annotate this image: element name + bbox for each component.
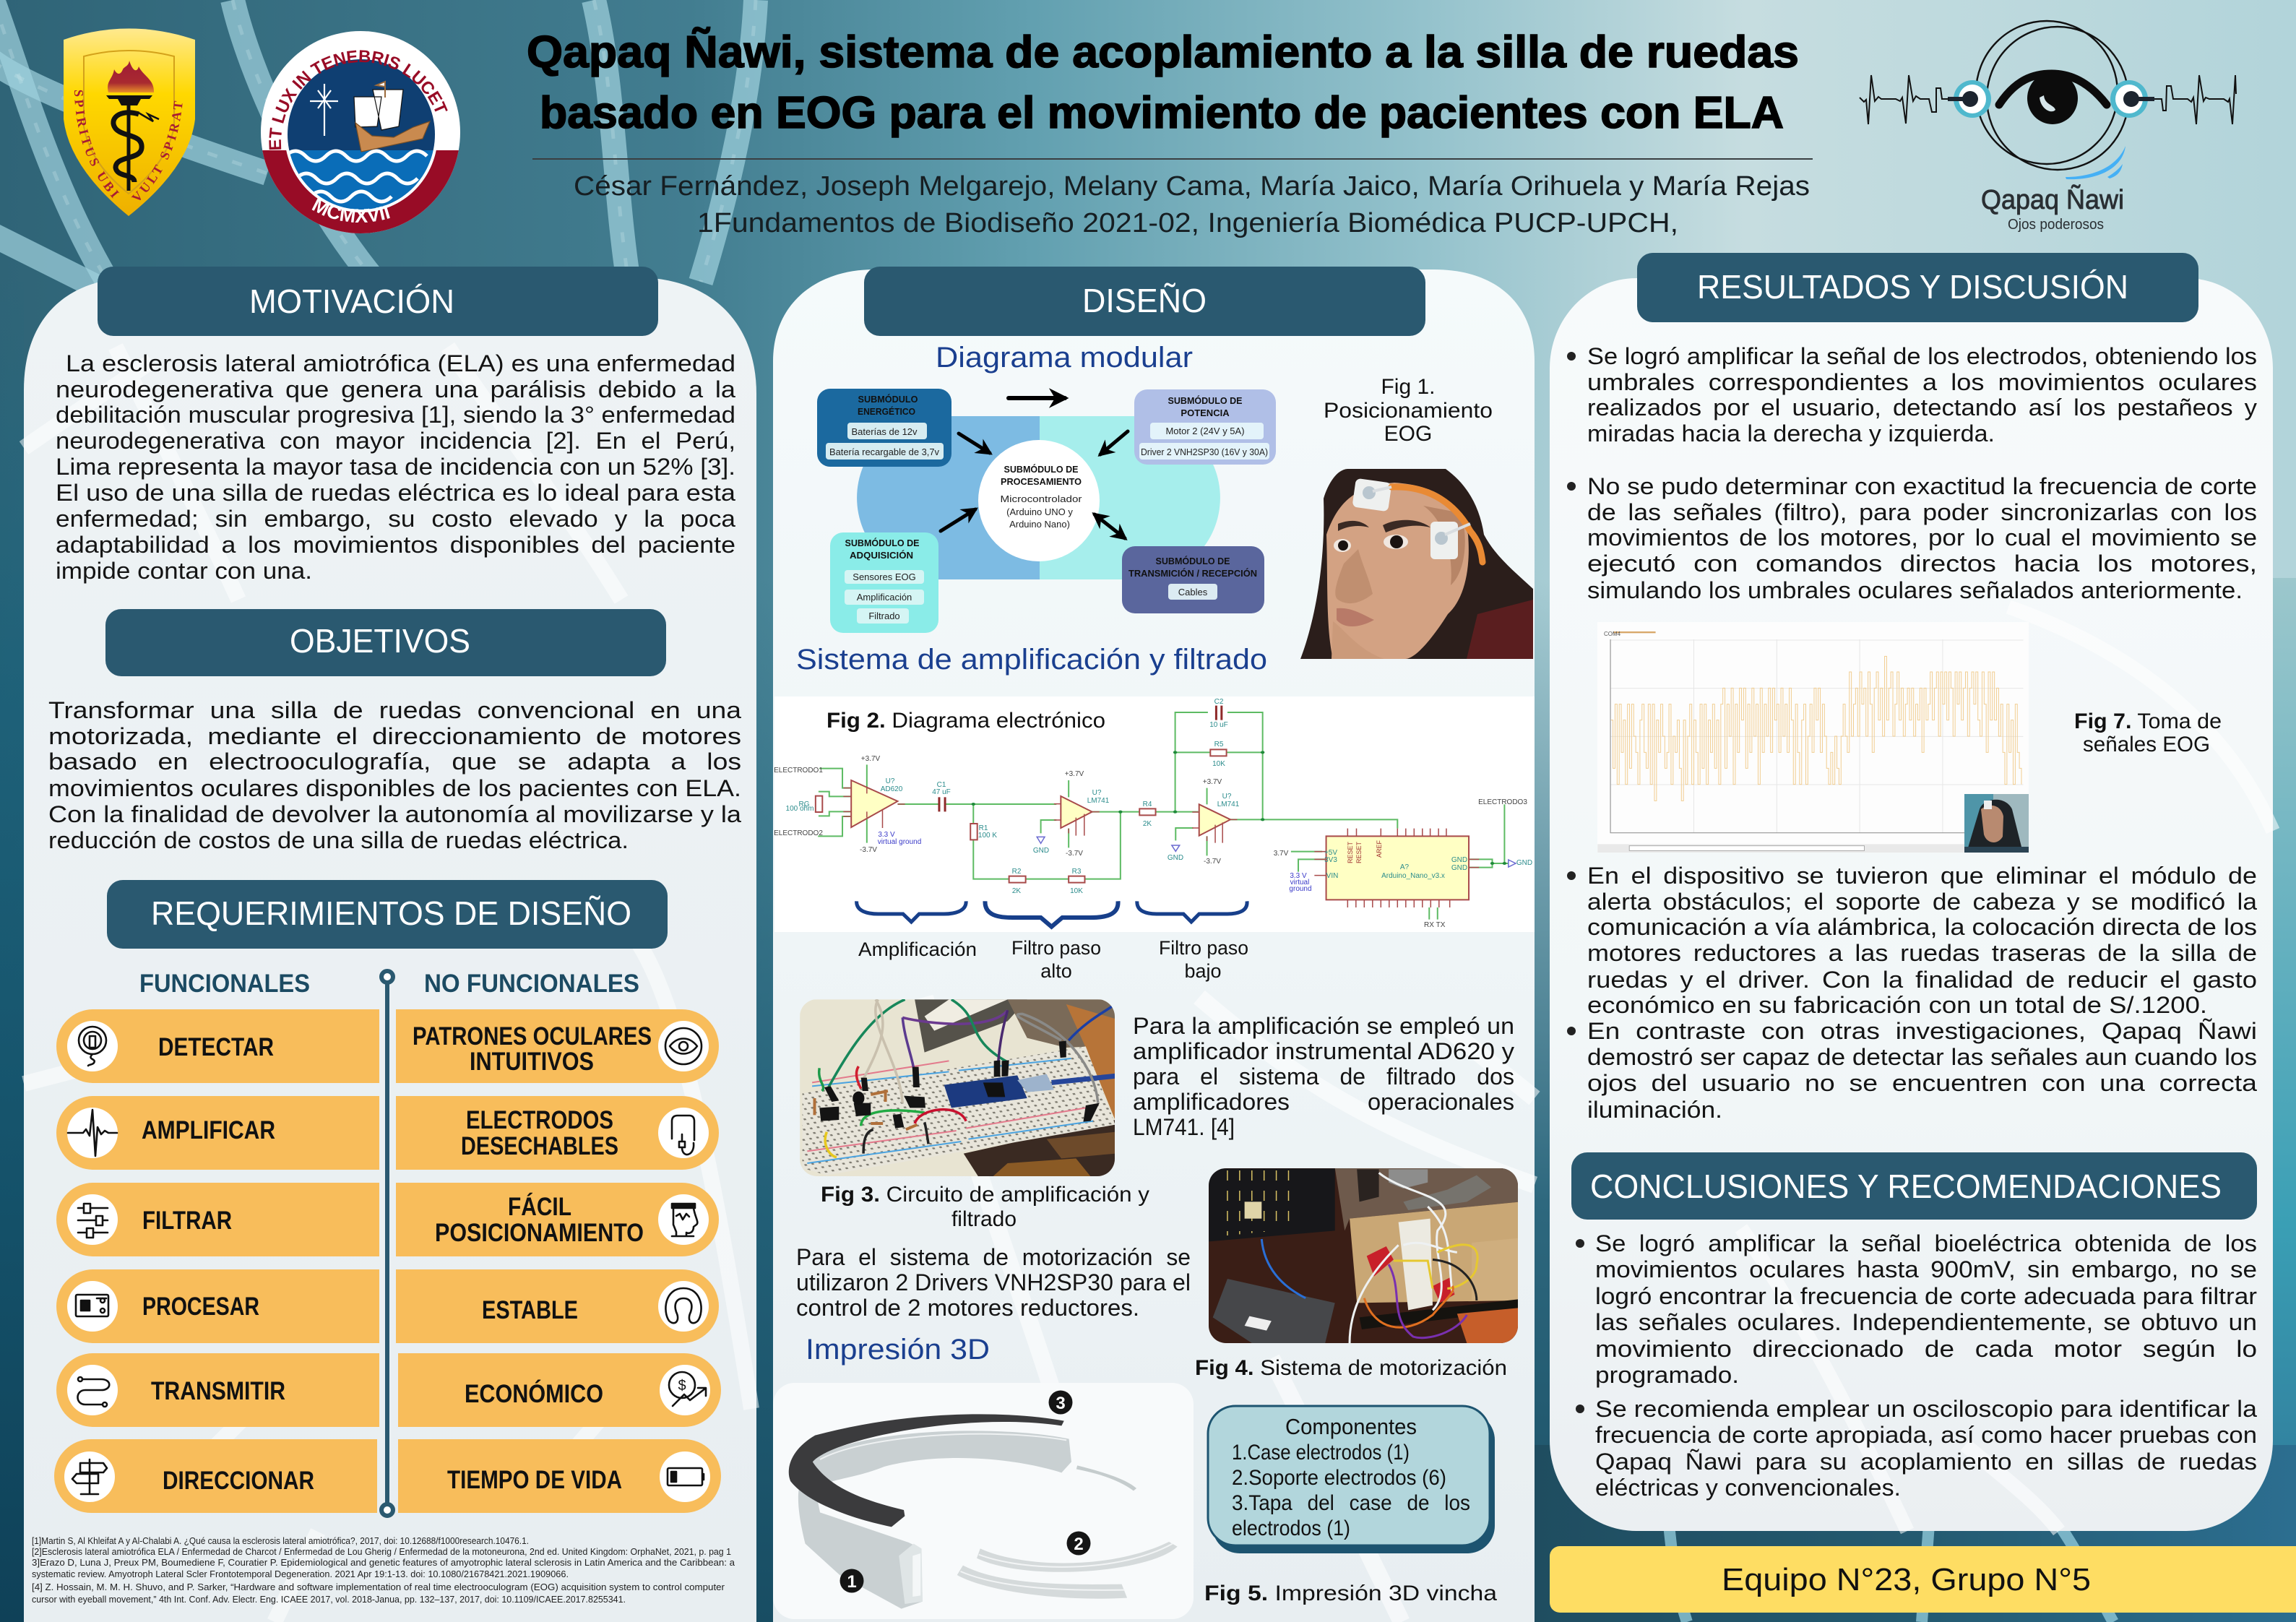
text block: amplification: [1133, 1013, 1514, 1140]
requirement: Electrodos desechables: [396, 1096, 719, 1170]
requirement: Transmitir: TRANSMITIR: [151, 1377, 285, 1405]
text block: Motivación: impide contar con una.: [56, 558, 312, 584]
electronic schematic: 10 uF: [1209, 721, 1228, 729]
electronic schematic: ELECTRODO2: [774, 829, 823, 837]
requirement: Estable: ESTABLE: [482, 1296, 578, 1324]
text block: Motivación: neurodegenerativa con mayor incidencia [2]. En el Perú,: [56, 428, 735, 454]
electronic schematic: virtual ground: [878, 838, 921, 846]
heading: Conclusiones y recomendaciones: CONCLUSIONES Y RECOMENDACIONES: [1590, 1168, 2222, 1205]
authors and affiliation: 1Fundamentos de Biodiseño 2021-02, Ingeniería Biomédica PUCP-UPCH,: [697, 208, 1678, 238]
schematic stage labels: alto: [1040, 960, 1072, 982]
requirement: Filtrar: FILTRAR: [142, 1207, 232, 1235]
callout 3: 3: [1056, 1394, 1066, 1413]
text block: results first bullets: umbrales correspondientes a los movimientos oculares: [1587, 369, 2257, 395]
electronic schematic: [774, 696, 1535, 932]
caption: Fig 4: Fig 4. Sistema de motorización: [1195, 1356, 1507, 1380]
text block: Motivación: El uso de una silla de ruedas eléctrica es lo ideal para esta: [56, 480, 735, 506]
electronic schematic: RESET: [1347, 841, 1354, 863]
text block: Motivación: adaptabilidad a los movimientos disponibles del paciente: [56, 532, 735, 558]
text block: amplification: amplificador instrumental AD620 y: [1133, 1038, 1514, 1064]
text block: conclusions: movimiento direccionado de cada motor según lo: [1595, 1336, 2257, 1362]
caption: Fig 2: Fig 2. Diagrama electrónico: [827, 709, 1105, 733]
electronic schematic: virtual: [1290, 879, 1309, 887]
text block: results second bullets: [1567, 863, 2257, 1123]
heading: Conclusiones y recomendaciones: [1571, 1152, 2257, 1220]
requirement: Patrones oculares intuitivos: [396, 1009, 719, 1083]
authors and affiliation: [574, 171, 1810, 238]
team banner: Equipo N°23, Grupo N°5: [1722, 1562, 2091, 1597]
module: adquisición: ADQUISICIÓN: [850, 550, 913, 561]
text block: conclusions: frecuencia de corte apropiada, así como hacer pruebas con: [1595, 1422, 2257, 1448]
requirement: Procesar: PROCESAR: [142, 1293, 259, 1321]
photo: face with electrodes: [1300, 469, 1533, 659]
electronic schematic: +3.7V: [861, 755, 881, 763]
caption: Fig 1: Posicionamiento: [1324, 399, 1493, 423]
brackets: [857, 901, 1247, 927]
heading: Resultados y discusión: [1637, 253, 2198, 322]
text block: conclusions: movimientos oculares hasta 900mV, sin embargo, no se: [1595, 1256, 2257, 1282]
callout 2: 2: [1074, 1535, 1084, 1554]
requirement: Direccionar: [54, 1439, 377, 1513]
electronic schematic: 3V3: [1324, 856, 1337, 864]
photo: amplification breadboard: [800, 999, 1115, 1176]
text block: Motivación: debilitación muscular progresiva [1], siendo la 3° enfermedad: [56, 402, 735, 428]
icon: pulse: [68, 1110, 117, 1156]
text block: motorization: [796, 1244, 1191, 1321]
electronic schematic: R2: [1012, 868, 1022, 876]
components box: Componentes: [1285, 1414, 1417, 1439]
title: Qapaq Ñawi, sistema de acoplamiento a la silla de ruedas: [527, 27, 1799, 77]
references: [32, 1535, 735, 1605]
requirement: Fácil posicionamiento: [396, 1183, 719, 1256]
column headings: [139, 970, 639, 998]
icon: circuit board: [76, 1295, 108, 1316]
electronic schematic: Arduino_Nano_v3.x: [1381, 872, 1445, 880]
electronic schematic: GND: [1451, 864, 1467, 872]
electronic schematic: 2K: [1012, 887, 1021, 895]
module: transmisión: [1122, 546, 1264, 613]
components box: 2.Soporte electrodos (6): [1232, 1466, 1446, 1490]
electronic schematic: VIN: [1326, 872, 1338, 880]
text block: results first bullets: realizados por el usuario, detectando así los pestañeos y: [1587, 394, 2257, 420]
electronic schematic: RESET: [1355, 841, 1363, 863]
electronic schematic: R5: [1214, 741, 1224, 749]
requirement: Fácil posicionamiento: FÁCIL: [508, 1192, 571, 1221]
text block: motorization: control de 2 motores reductores.: [796, 1295, 1139, 1321]
heading: Motivación: [98, 267, 658, 336]
text block: Objetivos: Transformar una silla de ruedas convencional en una: [48, 697, 741, 723]
text block: results second bullets: iluminación.: [1587, 1097, 1722, 1123]
electronic schematic: 3.3 V: [878, 831, 895, 839]
icon: money growth: $: [678, 1378, 686, 1394]
icon: battery: [668, 1468, 704, 1485]
3D printed headband render: [773, 1383, 1194, 1619]
icon: signpost: [72, 1459, 107, 1494]
text block: results second bullets: ojos del usuario no se encuentren con una correcta: [1587, 1070, 2257, 1096]
electronic schematic: U?: [1092, 789, 1102, 797]
logo: PUCP seal: MCMXVII: [312, 198, 390, 223]
module: adquisición: Filtrado: [868, 611, 900, 621]
icon: neck pillow: [665, 1288, 702, 1323]
electronic schematic: 47 uF: [932, 788, 951, 796]
requirement: Amplificar: AMPLIFICAR: [142, 1116, 275, 1144]
logo: Qapaq Ñawi eye: [1860, 21, 2236, 233]
heading: Requerimientos de diseño: [107, 880, 668, 949]
text block: results second bullets: alerta obstáculos; el soporte de cabeza y se modificó la: [1587, 889, 2257, 915]
requirement: Amplificar: [56, 1096, 379, 1170]
schematic stage labels: Filtro paso: [1011, 937, 1101, 959]
module: procesamiento: PROCESAMIENTO: [1001, 476, 1082, 487]
text block: results second bullets: ruedas y el driver. Con la finalidad de reducir el gasto: [1587, 967, 2257, 993]
electronic schematic: U?: [886, 777, 895, 785]
caption: Fig 7: Fig 7. Toma de: [2074, 709, 2222, 733]
electronic schematic: AREF: [1376, 840, 1383, 858]
text block: conclusions: programado.: [1595, 1362, 1739, 1388]
text block: results second bullets: demostró ser capaz de detectar las señales aun cuando los: [1587, 1044, 2257, 1070]
heading: Objetivos: OBJETIVOS: [290, 622, 470, 660]
module: adquisición: Amplificación: [857, 592, 912, 603]
text block: results second bullets: En el dispositivo se tuvieron que eliminar el módulo de: [1587, 863, 2257, 889]
title: basado en EOG para el movimiento de pacientes con ELA: [540, 88, 1784, 138]
text block: Motivación: La esclerosis lateral amiotrófica (ELA) es una enfermedad: [66, 350, 735, 376]
requirement: Direccionar: DIRECCIONAR: [163, 1467, 314, 1495]
arrows: [941, 398, 1128, 538]
electronic schematic: U?: [1222, 793, 1232, 801]
text block: amplification: amplificadores: [1133, 1089, 1290, 1115]
heading: Motivación: MOTIVACIÓN: [249, 282, 454, 320]
panel: left column: [24, 267, 756, 1622]
caption: Fig 3: Fig 3. Circuito de amplificación y: [821, 1183, 1149, 1207]
text block: conclusions: logró encontrar la frecuencia de corte adecuada para filtrar: [1595, 1283, 2257, 1309]
text block: Motivación: neurodegenerativa que genera una parálisis debido a la: [56, 376, 735, 402]
text block: conclusions: Se logró amplificar la señal bioeléctrica obtenida de los: [1595, 1230, 2257, 1256]
subheading: Sistema de amplificación y filtrado: Sistema de amplificación y filtrado: [796, 644, 1267, 676]
heading: Diseño: DISEÑO: [1082, 282, 1207, 319]
text block: results second bullets: económico en su fabricación con un total de S/.1200.: [1587, 992, 2207, 1018]
text block: motorization: utilizaron 2 Drivers VNH2SP30 para el: [796, 1269, 1191, 1295]
electronic schematic: ELECTRODO1: [774, 767, 823, 775]
callout 3: [1049, 1390, 1072, 1415]
text block: results first bullets: No se pudo determinar con exactitud la frecuencia de corte: [1587, 473, 2257, 499]
electronic schematic: AD620: [881, 785, 903, 793]
text block: conclusions: [1576, 1230, 2257, 1501]
module: adquisición: SUBMÓDULO DE: [845, 538, 920, 548]
electronic schematic: TX: [1436, 921, 1446, 929]
text block: Objetivos: reducción de costos de una silla de ruedas eléctrica.: [48, 827, 629, 853]
module: energético: SUBMÓDULO: [858, 394, 918, 405]
module: procesamiento: (Arduino UNO y: [1006, 506, 1073, 517]
requirement: Detectar: [56, 1009, 379, 1083]
panel: right column: [1550, 253, 2273, 1531]
text block: conclusions: Se recomienda emplear un osciloscopio para identificar la: [1595, 1396, 2257, 1422]
components box: 3.Tapa del case de los: [1232, 1491, 1470, 1515]
logo: Facultad de medicina shield: VULT SPIRAT: [131, 101, 183, 200]
heading: Requerimientos de diseño: REQUERIMIENTOS DE DISEÑO: [151, 894, 631, 932]
electronic schematic: 10K: [1212, 760, 1225, 768]
module: adquisición: Sensores EOG: [853, 571, 916, 582]
electronic schematic: LM741: [1217, 801, 1240, 808]
icon: electrode: [79, 1027, 106, 1066]
callout 1: 1: [847, 1572, 857, 1592]
electronic schematic: GND: [1516, 859, 1532, 867]
schematic stage labels: [858, 937, 1248, 982]
components box: electrodos (1): [1232, 1517, 1350, 1540]
electronic schematic: LM741: [1087, 797, 1110, 805]
module: transmisión: SUBMÓDULO DE: [1156, 556, 1230, 566]
electronic schematic: +3.7V: [1065, 770, 1084, 778]
caption: Fig 7: señales EOG: [2083, 733, 2210, 756]
references: [2]Esclerosis lateral amiotrófica ELA / Enfermedad de Charcot / Enfermedad de Lou Gherig / Enfermedad de la motoneurona, 2nd ed. United Kingdom: OrphaNet, 2021, p. pag 1: [32, 1546, 731, 1557]
text block: results second bullets: En contraste con otras investigaciones, Qapaq Ñawi: [1587, 1018, 2257, 1044]
electronic schematic: GND: [1451, 856, 1467, 864]
icon: money growth: [669, 1372, 706, 1406]
logo: Qapaq Ñawi eye: Ojos poderosos: [2008, 217, 2104, 233]
requirement: Tiempo de vida: [398, 1439, 721, 1513]
requirement: Económico: [398, 1353, 721, 1427]
module: procesamiento: Microcontrolador: [1000, 493, 1082, 504]
text block: results second bullets: comunicación a vía alámbrica, la colocación directa de los: [1587, 914, 2257, 940]
heading: Resultados y discusión: RESULTADOS Y DISCUSIÓN: [1697, 268, 2128, 306]
callout 2: [1066, 1532, 1091, 1555]
electronic schematic: A?: [1400, 863, 1410, 871]
text block: results second bullets: motores reductores a las ruedas traseras de la silla de: [1587, 940, 2257, 966]
electronic schematic: -3.7V: [860, 846, 877, 854]
text block: conclusions: las señales oculares. Independientemente, se obtuvo un: [1595, 1309, 2257, 1335]
logo: PUCP seal: ET LUX IN TENEBRIS LUCET: [269, 50, 448, 150]
caption: Fig 5: Fig 5. Impresión 3D vincha: [1204, 1582, 1497, 1605]
text block: results first bullets: ejecutó con comandos directos hacia los motores,: [1587, 551, 2257, 577]
electronic schematic: ELECTRODO3: [1478, 798, 1527, 806]
components box: [1208, 1406, 1495, 1553]
module: procesamiento: [1000, 464, 1082, 530]
panel: centre column: [773, 267, 1535, 1622]
module: potencia: [1134, 389, 1276, 465]
text block: Motivación: [56, 350, 735, 584]
electronic schematic: 2K: [1143, 820, 1152, 828]
timeline divider: [381, 971, 393, 1516]
text block: amplification: Para la amplificación se empleó un: [1133, 1013, 1514, 1039]
electronic schematic: R1: [979, 824, 988, 832]
webcam inset: [1964, 794, 2029, 853]
module: potencia: Motor 2 (24V y 5A): [1165, 426, 1245, 436]
electronic schematic: 100 K: [978, 832, 997, 840]
heading: Diseño: [864, 267, 1425, 336]
module: energético: Baterías de 12v: [851, 426, 918, 437]
requirement: Patrones oculares intuitivos: INTUITIVOS: [470, 1048, 594, 1076]
text block: results first bullets: movimientos de los motores, por lo cual el movimiento se: [1587, 525, 2257, 551]
logo: Qapaq Ñawi eye: Qapaq Ñawi: [1981, 184, 2124, 215]
schematic stage labels: Amplificación: [858, 939, 977, 960]
electronic schematic: +5V: [1324, 849, 1337, 857]
module: adquisición: [830, 532, 938, 633]
icon: sliders: [78, 1204, 108, 1238]
column headings: FUNCIONALES: [139, 970, 310, 998]
requirement: Tiempo de vida: TIEMPO DE VIDA: [447, 1466, 622, 1494]
requirement: Electrodos desechables: ELECTRODOS: [466, 1106, 613, 1134]
electronic schematic: C1: [937, 781, 946, 789]
components box: 1.Case electrodos (1): [1232, 1441, 1410, 1464]
caption: Fig 7: [2074, 709, 2222, 756]
text block: Objetivos: Con la finalidad de devolver la autonomía al movilizarse y la: [48, 801, 741, 827]
electronic schematic: 3.3 V: [1290, 872, 1307, 880]
caption: Fig 3: [821, 1183, 1149, 1231]
requirement: Patrones oculares intuitivos: PATRONES OCULARES: [413, 1022, 652, 1051]
icon: electrode pad: [672, 1116, 694, 1155]
electronic schematic: R3: [1072, 868, 1082, 876]
electronic schematic: 3.7V: [1274, 850, 1289, 858]
module: transmisión: Cables: [1178, 587, 1208, 598]
text block: conclusions: eléctricas y convencionales.: [1595, 1475, 1901, 1501]
subheading: Impresión 3D: Impresión 3D: [806, 1334, 990, 1366]
text block: Objetivos: basado en electrooculografía, que se adapta a los: [48, 749, 741, 775]
caption: Fig 3: filtrado: [951, 1207, 1017, 1231]
electronic schematic: -3.7V: [1066, 850, 1083, 858]
references: cursor with eyeball movement,” 4th Int. Conf. Adv. Electr. Eng. ICAEE 2017, vol. 2018-Janua, pp. 132–137, 2017, doi: 10.1109/ICAEE.2017.8255341.: [32, 1594, 626, 1605]
chart: EOG serial plotter screenshot: COM4: [1604, 631, 1621, 637]
text block: motorization: Para el sistema de motorización se: [796, 1244, 1191, 1270]
electronic schematic: +3.7V: [1203, 778, 1222, 786]
text block: results first bullets: de las señales (filtro), para poder sincronizarlas con los: [1587, 499, 2257, 525]
logo: PUCP seal: [261, 31, 460, 233]
module: potencia: SUBMÓDULO DE: [1168, 395, 1243, 406]
caption: Fig 1: [1324, 375, 1493, 446]
icon: head: [672, 1204, 697, 1236]
title: [527, 27, 1813, 160]
electronic schematic: C2: [1214, 698, 1224, 706]
callout 1: [840, 1569, 864, 1592]
caption: Fig 1: Fig 1.: [1381, 375, 1436, 399]
authors and affiliation: César Fernández, Joseph Melgarejo, Melany Cama, María Jaico, María Orihuela y María Rejas: [574, 171, 1810, 202]
electronic schematic: ground: [1289, 885, 1312, 893]
requirement: Estable: [396, 1269, 719, 1343]
requirement: Económico: ECONÓMICO: [465, 1379, 603, 1408]
electronic schematic: R4: [1143, 801, 1152, 808]
module: energético: ENERGÉTICO: [858, 406, 915, 417]
electronic schematic: 100 ohm: [786, 805, 813, 813]
text block: results first bullets: [1567, 343, 2257, 603]
requirement: Electrodos desechables: DESECHABLES: [461, 1132, 618, 1160]
module: procesamiento: Arduino Nano): [1009, 519, 1070, 530]
module: procesamiento: SUBMÓDULO DE: [1004, 464, 1079, 475]
logo: Facultad de medicina shield: [64, 29, 195, 216]
caption: Fig 1: EOG: [1384, 422, 1432, 446]
text block: results first bullets: Se logró amplificar la señal de los electrodos, obteniendo los: [1587, 343, 2257, 369]
text block: amplification: para el sistema de filtrado dos: [1133, 1064, 1514, 1090]
references: 3]Erazo D, Luna J, Preux PM, Boumediene F, Couratier P. Epidemiological and genetic features of amyotrophic lateral sclerosis in Latin America and the Caribbean: a: [32, 1557, 735, 1568]
text block: results first bullets: simulando los umbrales oculares señalados anteriormente.: [1587, 577, 2243, 603]
photo: motor system: [1208, 1168, 1521, 1344]
icon: eye: [665, 1028, 702, 1064]
electronic schematic: -3.7V: [1204, 858, 1221, 866]
module: energético: [817, 389, 951, 467]
text block: amplification: LM741. [4]: [1133, 1114, 1235, 1140]
requirement: Procesar: [56, 1269, 379, 1343]
schematic stage labels: bajo: [1184, 960, 1222, 982]
column headings: NO FUNCIONALES: [424, 970, 639, 998]
module: transmisión: TRANSMICIÓN / RECEPCIÓN: [1128, 568, 1257, 579]
subheading: Diagrama modular: Diagrama modular: [936, 342, 1193, 374]
chart: EOG serial plotter screenshot: [1597, 622, 2029, 853]
logo: Facultad de medicina shield: SPIRITUS UBI: [74, 90, 120, 198]
references: [1]Martin S, Al Khleifat A y Al-Chalabi A. ¿Qué causa la esclerosis lateral amiotrófica?, 2017, doi: 10.12688/f1000research.10476.1.: [32, 1535, 529, 1546]
references: [4] Z. Hossain, M. M. H. Shuvo, and P. Sarker, “Hardware and software implementation of real time electrooculogram (EOG) acquisition system to control computer: [32, 1582, 725, 1592]
modular diagram: [817, 389, 1276, 633]
module: energético: Batería recargable de 3,7v: [829, 447, 939, 457]
electronic schematic: RX: [1424, 921, 1434, 929]
team banner: [1550, 1546, 2296, 1613]
requirement: Detectar: DETECTAR: [158, 1033, 274, 1061]
text block: results first bullets: miradas hacia la derecha y izquierda.: [1587, 420, 1995, 447]
references: systematic review. Amyotroph Lateral Scler Frontotemporal Degeneration. 2021 Apr 19:1-13. doi: 10.1080/21678421.2021.1909066.: [32, 1569, 569, 1579]
text block: Objetivos: motorizada, mediante el direccionamiento de motores: [48, 723, 741, 749]
requirement: Fácil posicionamiento: POSICIONAMIENTO: [435, 1219, 644, 1247]
electronic schematic: GND: [1168, 854, 1183, 862]
requirement: Transmitir: [56, 1353, 379, 1427]
module: potencia: POTENCIA: [1181, 407, 1230, 418]
text block: conclusions: Qapaq Ñawi para su acoplamiento en sillas de ruedas: [1595, 1449, 2257, 1475]
text block: Motivación: Lima representa la mayor tasa de incidencia con un 52% [3].: [56, 454, 735, 480]
icon: cable: [78, 1377, 109, 1407]
text block: Motivación: enfermedad; sin embargo, su costo elevado y la poca: [56, 506, 735, 532]
heading: Objetivos: [105, 609, 666, 676]
schematic stage labels: Filtro paso: [1159, 937, 1248, 959]
text block: amplification: operacionales: [1368, 1089, 1514, 1115]
requirement: Filtrar: [56, 1183, 379, 1256]
text block: Objetivos: movimientos oculares disponibles de los pacientes con ELA.: [48, 775, 741, 801]
electronic schematic: 10K: [1070, 887, 1083, 895]
text block: Objetivos: [48, 697, 741, 853]
module: potencia: Driver 2 VNH2SP30 (16V y 30A): [1141, 447, 1268, 457]
electronic schematic: GND: [1033, 847, 1049, 855]
electronic schematic: RG: [799, 801, 810, 808]
